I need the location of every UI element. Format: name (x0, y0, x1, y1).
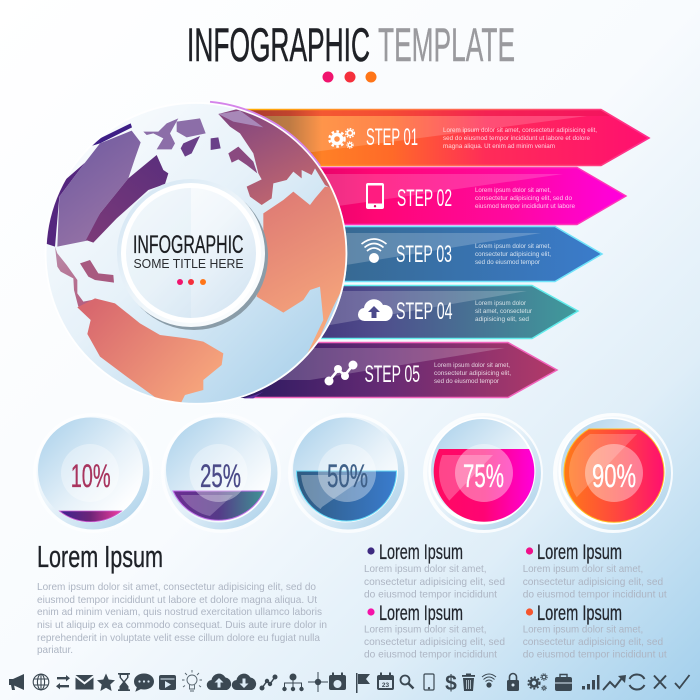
icon: gears (329, 129, 354, 148)
step 02 label: STEP 02 (397, 185, 452, 212)
list item 1: do eiusmod tempor incididunt (364, 588, 497, 600)
step 05 description: sed do eiusmod tempor (434, 378, 500, 385)
title: INFOGRAPHIC (187, 18, 370, 71)
list item 2: Lorem ipsum dolor sit amet, (523, 563, 643, 575)
list item 4: do eiusmod tempor incididunt ut (523, 648, 667, 660)
list item 1: Lorem Ipsum (379, 541, 463, 564)
gauge: 90%: 90% (592, 458, 636, 494)
main paragraph: nisi ut aliquip ex ea commodo consequat. Duis aute irure dolor in (37, 619, 327, 631)
list item 1 (364, 541, 505, 600)
list item 2: consectetur adipisicing elit, sed (523, 576, 663, 588)
list item 4 (523, 602, 667, 660)
gauge: 10%: 10% (71, 458, 111, 494)
step 05 description: Lorem ipsum dolor sit amet, (434, 362, 510, 369)
icon: globe (33, 674, 49, 690)
list item 2: Lorem Ipsum (537, 541, 622, 564)
icon: light bulb (182, 670, 202, 691)
icon: dollar sign: $ (445, 672, 457, 695)
step 04 description: Lorem ipsum dolor (475, 300, 527, 307)
step 04 description: adipisicing elit, sed (475, 316, 529, 323)
step 05 description: consectetur adipisicing elit, (434, 370, 511, 377)
icon: briefcase (555, 674, 572, 691)
icon: swap arrows (56, 675, 70, 689)
icon: megaphone (9, 674, 24, 690)
continents (45, 108, 348, 405)
gauge: 75% (423, 413, 543, 540)
icon: check (675, 675, 690, 688)
gauge: 25% (166, 418, 278, 530)
main paragraph: eiusmod tempor incididunt ut labore et dolore magna aliqua. Ut (37, 594, 317, 606)
badge dots (177, 279, 206, 285)
step 01 description: Lorem ipsum dolor sit amet, consectetur adipisicing elit, (443, 127, 597, 134)
icon: calendar: 23 (382, 682, 389, 689)
step 05 label: STEP 05 (364, 361, 420, 388)
gauge: 90% (553, 413, 673, 540)
icon: padlock (507, 674, 519, 691)
icon: refresh (630, 674, 644, 690)
gauge: 75%: 75% (463, 458, 504, 494)
icon: line graph (260, 674, 278, 690)
list item 4: Lorem Ipsum (537, 602, 622, 625)
gauge: 25%: 25% (200, 458, 241, 494)
step 01 description: magna aliqua. Ut enim ad minim veniam (443, 143, 555, 150)
step 03 description (475, 243, 551, 266)
list item 3 (364, 602, 505, 660)
step 01 description (443, 127, 597, 150)
step 02 description: eiusmod tempor incididunt ut labore (475, 203, 575, 210)
icon: star (97, 674, 115, 691)
arrow: step 03 (240, 226, 603, 282)
main paragraph: reprehenderit in voluptate velit esse cillum dolore eu fugiat nulla (37, 632, 320, 644)
icon: crosshair node (308, 672, 328, 692)
icon: trash (462, 674, 475, 691)
arrow: step 01 (240, 109, 650, 166)
step 01 description: sed do eiusmod tempor incididunt ut labore et dolore (443, 135, 590, 142)
step 01 label: STEP 01 (366, 124, 418, 151)
step 02 description: Lorem ipsum dolor sit amet, (475, 187, 551, 194)
step 03 description: Lorem ipsum dolor sit amet, (475, 243, 551, 250)
icon: cloud upload (358, 299, 393, 321)
icon: envelope (76, 675, 94, 690)
arrow: step 02 (240, 167, 627, 225)
gauge: 50% (288, 413, 408, 540)
list item 2 (523, 541, 667, 600)
title: TEMPLATE (378, 18, 515, 71)
icon: wifi (482, 674, 496, 688)
icon: phone (424, 674, 434, 690)
icon: cloud upload (207, 674, 231, 690)
icon: hourglass (118, 673, 130, 691)
list item 4: consectetur adipisicing elit, sed (523, 636, 663, 648)
list item 1: Lorem ipsum dolor sit amet, (364, 563, 486, 575)
icon: wifi (362, 239, 386, 263)
globe (45, 102, 348, 405)
list item 3: Lorem Ipsum (379, 602, 463, 625)
step 03 description: sed do eiusmod tempor (475, 259, 541, 266)
step 02 description (475, 187, 575, 210)
step 04 description: sit amet, consectetur (475, 308, 533, 315)
gauge: 50%: 50% (327, 458, 368, 494)
icon: gears (528, 674, 547, 690)
list item 4: Lorem ipsum dolor sit amet, (523, 624, 643, 636)
icon: dollar calendar (329, 672, 346, 690)
step 04 description (475, 300, 533, 323)
icon: search (400, 676, 414, 688)
icon: video window (159, 675, 176, 690)
icon: signal bars (582, 675, 600, 690)
list item 2: do eiusmod tempor incididunt ut (523, 588, 667, 600)
step 05 description (434, 362, 511, 385)
badge subtitle: SOME TITLE HERE (134, 256, 244, 271)
list item 3: do eiusmod tempor incididunt (364, 648, 497, 660)
icon: chat bubble (134, 673, 154, 692)
badge title: INFOGRAPHIC (133, 231, 244, 259)
icon: flag (356, 673, 370, 693)
main paragraph (37, 581, 327, 656)
icon: cross (654, 676, 666, 688)
icon: tablet (366, 183, 384, 209)
step 03 description: consectetur adipisicing elit, (475, 251, 551, 258)
gauge: 10% (33, 413, 153, 533)
icon: hierarchy (282, 674, 304, 691)
list item 1: consectetur adipisicing elit, sed (364, 576, 505, 588)
arrow: step 04 (240, 285, 579, 339)
icon: calendar (377, 672, 394, 690)
icon: line graph (324, 360, 358, 386)
list item 3: consectetur adipisicing elit, sed (364, 636, 505, 648)
icon: cloud download (232, 674, 256, 690)
main paragraph: Lorem ipsum dolor sit amet, consectetur adipisicing elit, sed do (37, 581, 316, 593)
heading: lorem ipsum: Lorem Ipsum (37, 539, 163, 574)
step 04 label: STEP 04 (396, 298, 452, 325)
arrow: step 05 (240, 342, 558, 398)
icon row (9, 670, 690, 695)
step 03 label: STEP 03 (396, 241, 452, 268)
title dots (322, 72, 376, 82)
main paragraph: enim ad minim veniam, quis nostrud exercitation ullamco laboris (37, 606, 322, 618)
globe center badge (117, 179, 268, 330)
list item 3: Lorem ipsum dolor sit amet, (364, 624, 486, 636)
icon: trend arrow (603, 675, 626, 690)
step 02 description: consectetur adipisicing elit, sed do (475, 195, 572, 202)
main paragraph: pariatur. (37, 644, 73, 656)
